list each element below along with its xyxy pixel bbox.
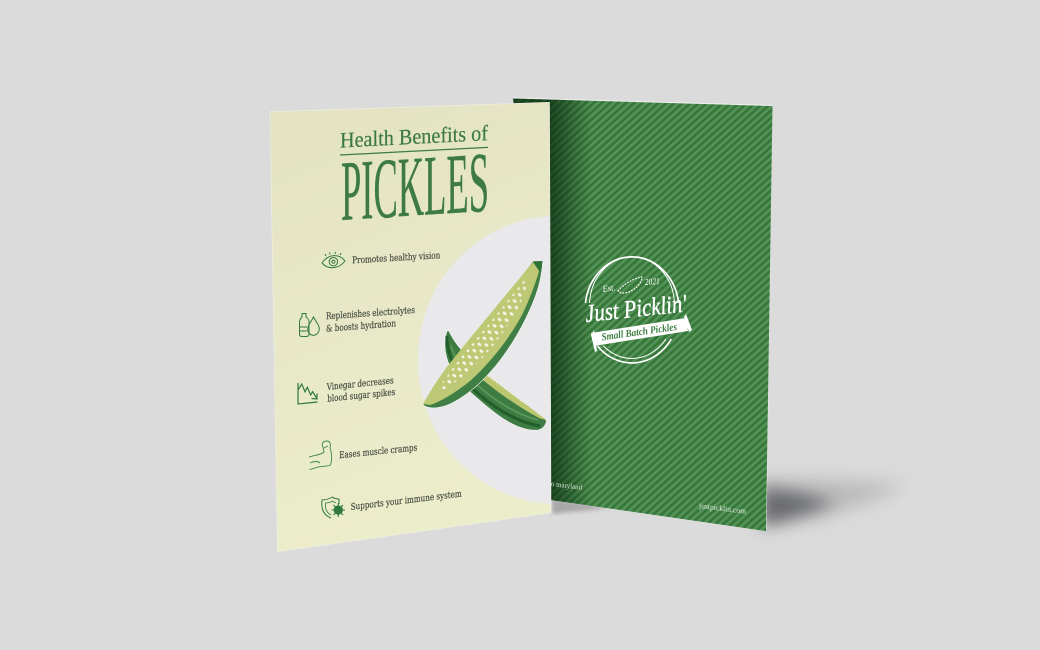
benefit: hydration (300, 305, 415, 336)
text: boosts hydration: & boosts hydration (326, 318, 396, 335)
text: vision: Promotes healthy vision (352, 250, 440, 266)
text: vinegar: Vinegar decreases (326, 375, 394, 393)
benefit: immune (322, 489, 462, 518)
text: cramps: Eases muscle cramps (339, 442, 418, 461)
white circle (418, 216, 551, 504)
panel: front card: PICKLES (341, 134, 489, 239)
mockup scene (270, 98, 896, 552)
text: electrolytes: Replenishes electrolytes (326, 305, 415, 322)
logo pickle sprig (618, 277, 642, 293)
icon: shield and virus (322, 497, 345, 518)
footer website: justpicklin.com (698, 501, 747, 516)
panel: front card (270, 102, 552, 552)
title line one: Health Benefits of (340, 120, 489, 153)
back pickle (445, 331, 546, 430)
icon: bottle and drop (300, 314, 319, 336)
icon: falling chart (298, 383, 318, 404)
logo est: Est. (601, 282, 616, 294)
ground shadow of back card (760, 479, 905, 528)
benefit: vision (322, 250, 440, 268)
text: blood sugar: blood sugar spikes (327, 387, 396, 405)
footer location: o maryland (551, 479, 582, 492)
illustration: crossed pickles (423, 261, 546, 430)
benefit: blood sugar (298, 375, 396, 405)
front pickle (423, 261, 542, 408)
logo name: Just Picklin' (584, 290, 689, 328)
panel: back card (513, 98, 772, 531)
logo rings (585, 257, 679, 363)
title rule (340, 147, 488, 155)
logo year: 2021 (644, 276, 660, 287)
shadow between cards (552, 498, 610, 514)
logo tagline: Small Batch Pickles (601, 322, 678, 343)
seeds (436, 278, 527, 393)
benefit: cramps (309, 441, 418, 470)
text: immune: Supports your immune system (351, 489, 462, 513)
icon: flexed arm (309, 441, 332, 470)
logo (584, 257, 692, 363)
icon: eye (322, 252, 345, 268)
